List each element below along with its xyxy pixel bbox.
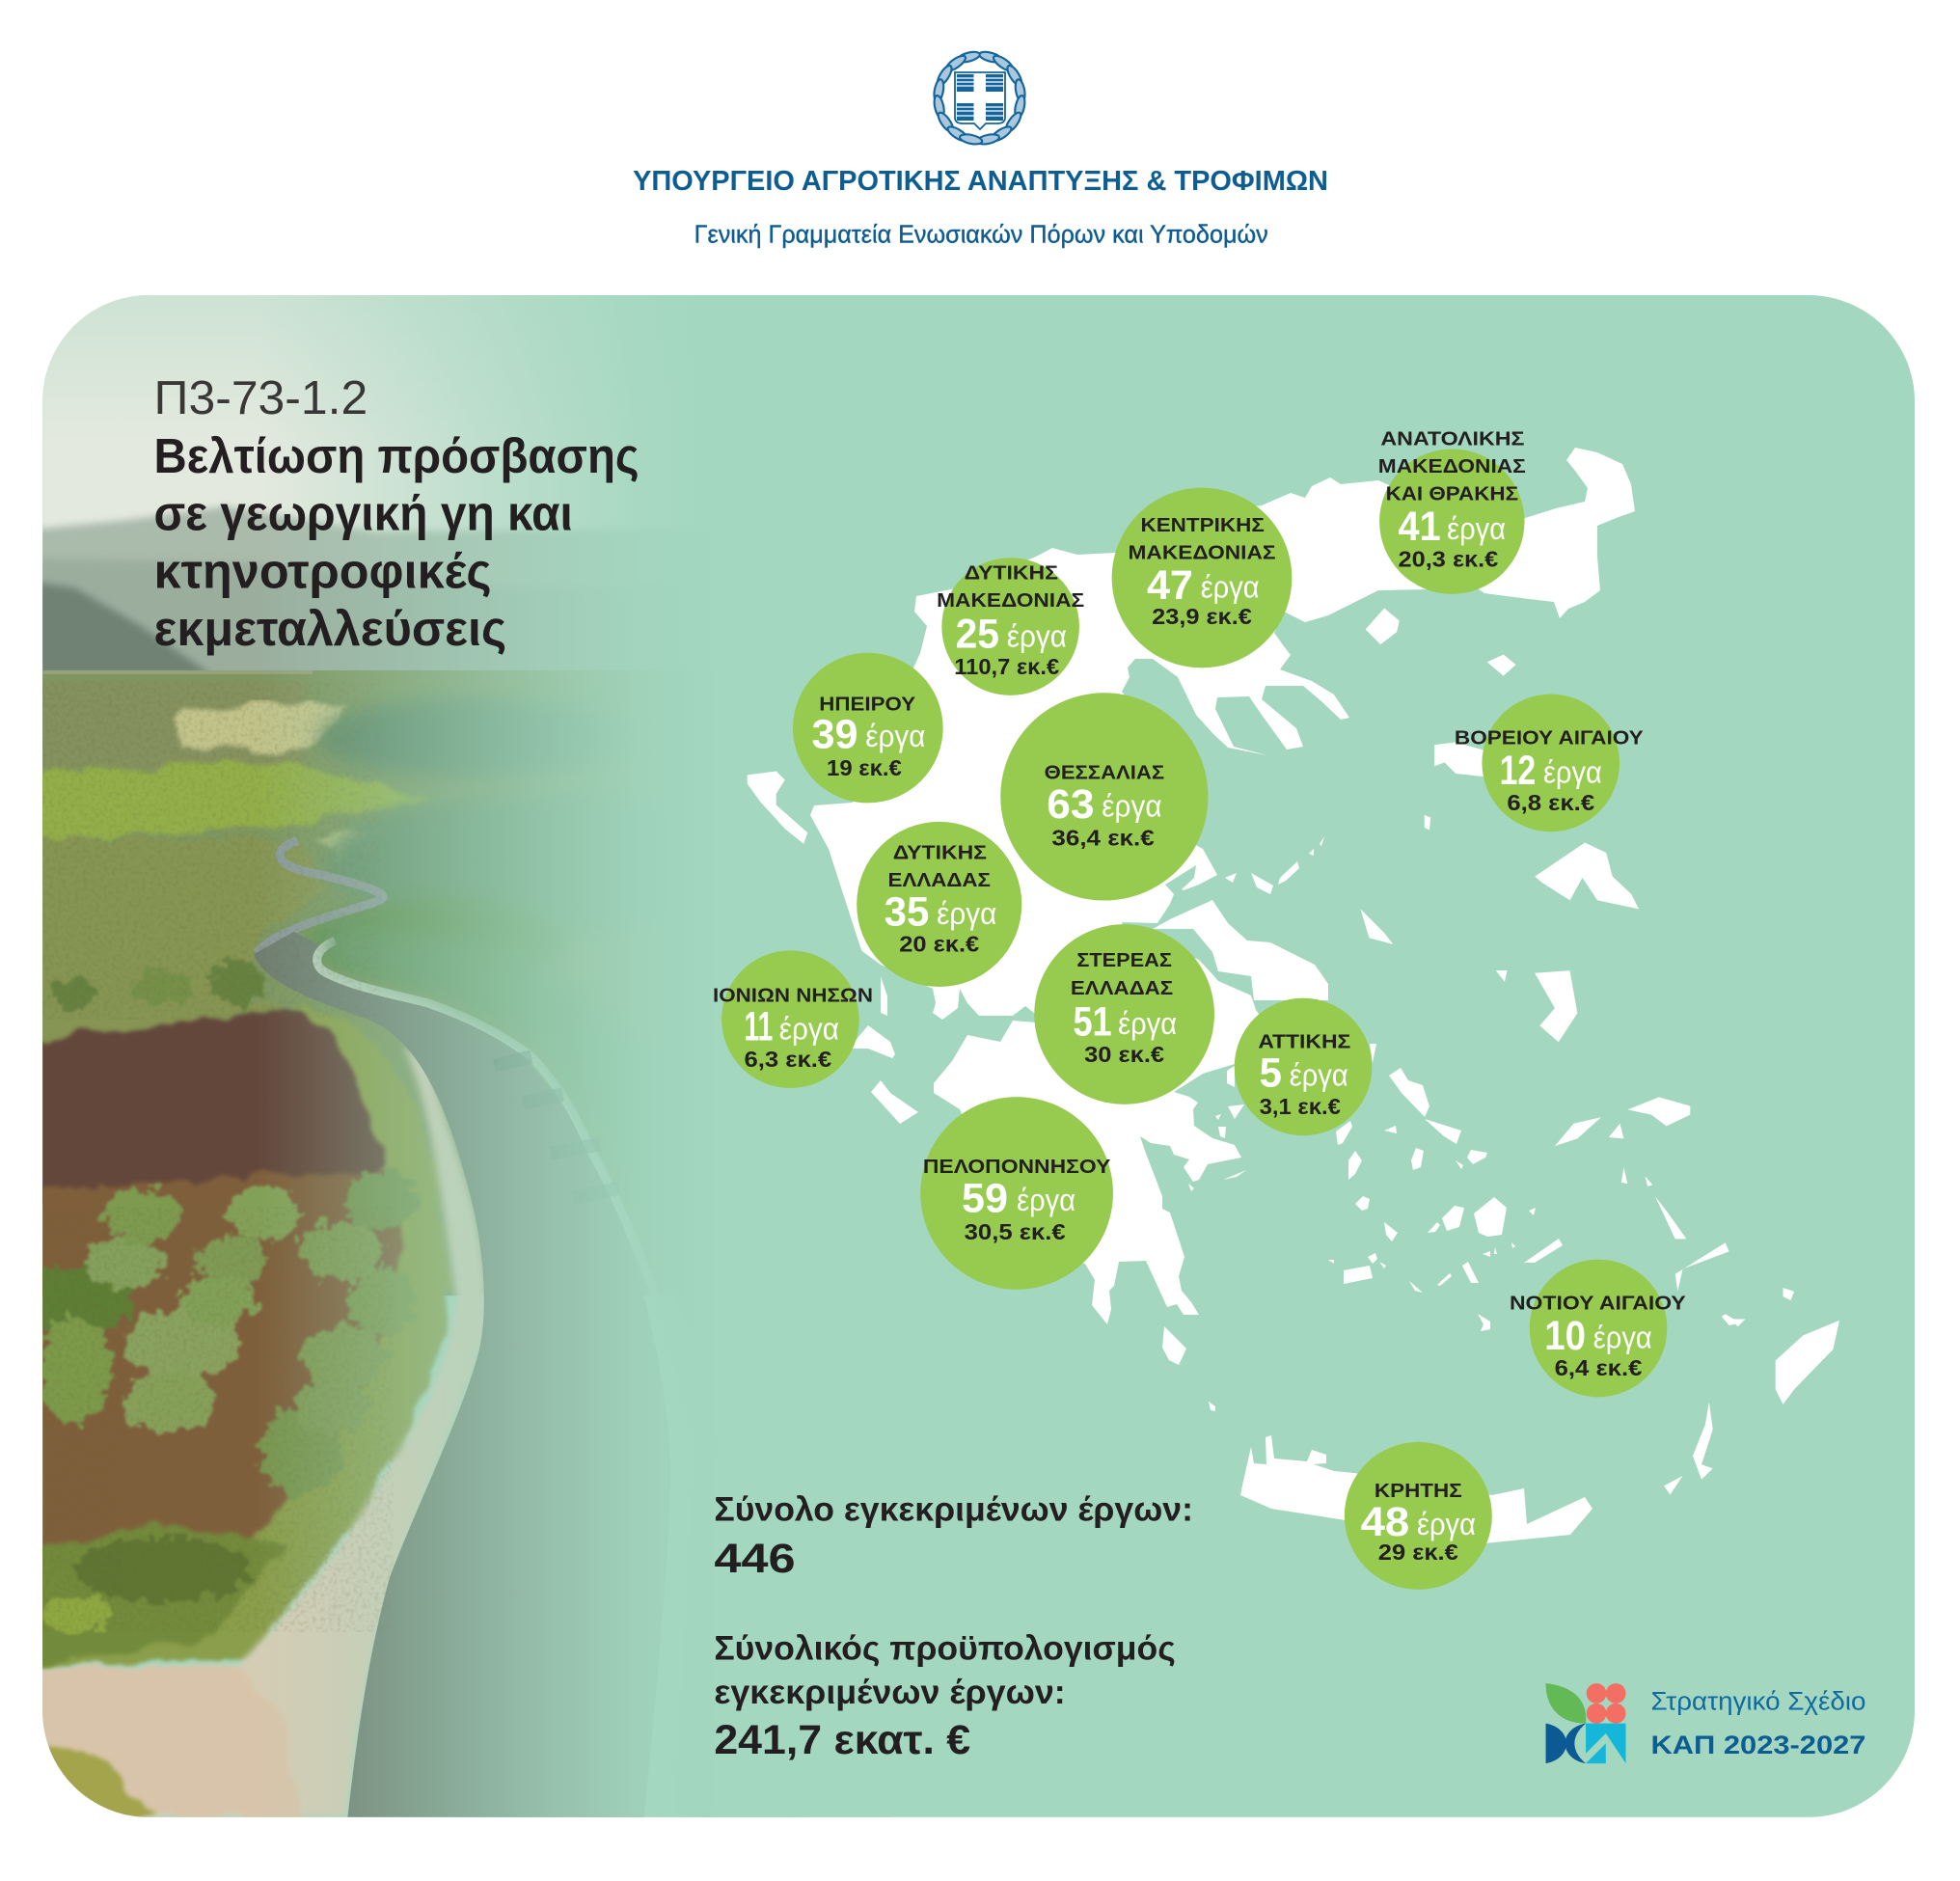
Crete <box>1240 1435 1592 1543</box>
region bubble: Attiki: έργα <box>1290 1057 1348 1092</box>
region bubble: Sterea Ellada: ΣΤΕΡΕΑΣ <box>1076 949 1172 971</box>
summary: total approved projects <box>714 1491 1193 1582</box>
region bubble: Dytiki Ellada <box>857 822 1021 987</box>
region bubble: Dytiki Ellada: ΕΛΛΑΔΑΣ <box>888 869 991 891</box>
region bubble: Kriti: 48 <box>1361 1499 1409 1545</box>
region bubble: Peloponnisos: ΠΕΛΟΠΟΝΝΗΣΟΥ <box>923 1156 1111 1178</box>
region bubble: Dytiki Makedonia: έργα <box>1007 618 1067 653</box>
region bubble: Thessalia: 63 <box>1047 781 1095 828</box>
mainland <box>810 448 1635 1324</box>
region bubble: Voreio Aigaio: έργα <box>1543 755 1602 790</box>
region bubble: Thessalia: ΘΕΣΣΑΛΙΑΣ <box>1045 762 1164 784</box>
header: ministry emblem <box>933 50 1026 146</box>
summary: total budget: εγκεκριμένων έργων: <box>714 1674 1066 1711</box>
region bubble: Notio Aigaio: 6,4 εκ.€ <box>1555 1355 1643 1380</box>
region bubble: Thessalia: 36,4 εκ.€ <box>1051 825 1155 850</box>
region bubble: Ionia Nisia: 11 <box>744 1004 773 1050</box>
region bubble: Notio Aigaio: ΝΟΤΙΟΥ ΑΙΓΑΙΟΥ <box>1510 1292 1686 1314</box>
summary: total budget: 241,7 εκατ. € <box>714 1717 970 1763</box>
region bubble: Attiki: 3,1 εκ.€ <box>1260 1094 1341 1119</box>
region bubble: Dytiki Makedonia: ΔΥΤΙΚΗΣ <box>965 561 1058 584</box>
region bubble: Dytiki Makedonia <box>937 558 1084 695</box>
logo text: Στρατηγικό Σχέδιο <box>1650 1685 1865 1715</box>
olive trees <box>25 959 417 1631</box>
region bubble: Ionia Nisia: 6,3 εκ.€ <box>744 1047 832 1072</box>
region bubble: Sterea Ellada: έργα <box>1118 1006 1177 1041</box>
region bubble: Ipeiros: 39 <box>811 711 858 757</box>
summary: total budget <box>714 1630 1176 1763</box>
region bubble: Kriti: 29 εκ.€ <box>1378 1540 1458 1565</box>
summary: total approved projects: Σύνολο εγκεκριμένων έργων: <box>714 1491 1193 1529</box>
region bubble: Dytiki Ellada: 20 εκ.€ <box>899 932 980 957</box>
region bubble: Dytiki Makedonia: ΜΑΚΕΔΟΝΙΑΣ <box>937 589 1084 612</box>
region bubble: Anatoliki Makedonia kai Thraki: ΚΑΙ ΘΡΑΚΗΣ <box>1386 483 1518 505</box>
region bubble: Ipeiros: έργα <box>865 719 925 753</box>
region bubble: Anatoliki Makedonia kai Thraki: 20,3 εκ.€ <box>1399 546 1499 571</box>
region bubble: Kriti: έργα <box>1417 1507 1476 1541</box>
region bubble: Attiki: ΑΤΤΙΚΗΣ <box>1258 1031 1350 1053</box>
region bubble: Dytiki Ellada: 35 <box>885 888 929 935</box>
summary: total budget: Σύνολικός προϋπολογισμός <box>714 1630 1176 1668</box>
header: ministry name: ΥΠΟΥΡΓΕΙΟ ΑΓΡΟΤΙΚΗΣ ΑΝΑΠΤΥΞΗΣ & ΤΡΟΦΙΜΩΝ <box>633 166 1328 197</box>
region bubble: Dytiki Ellada: έργα <box>937 896 996 931</box>
region bubble: Sterea Ellada: ΕΛΛΑΔΑΣ <box>1071 977 1173 999</box>
region bubble: Attiki: 5 <box>1260 1050 1282 1097</box>
region bubble: Peloponnisos: 30,5 εκ.€ <box>965 1219 1066 1244</box>
title: κτηνοτροφικές <box>154 543 492 598</box>
title: εκμεταλλεύσεις <box>154 601 506 656</box>
code heading: Π3-73-1.2 <box>154 371 368 424</box>
logo text <box>1650 1685 1865 1759</box>
title <box>154 428 640 656</box>
region bubble: Attiki <box>1235 998 1372 1135</box>
region bubble: Kentriki Makedonia: έργα <box>1201 570 1260 605</box>
region bubble: Anatoliki Makedonia kai Thraki: ΑΝΑΤΟΛΙΚΗΣ <box>1380 428 1525 450</box>
logo text: ΚΑΠ 2023-2027 <box>1650 1730 1865 1759</box>
region bubble: Voreio Aigaio: ΒΟΡΕΙΟΥ ΑΙΓΑΙΟΥ <box>1455 726 1644 749</box>
region bubble: Anatoliki Makedonia kai Thraki: ΜΑΚΕΔΟΝΙΑΣ <box>1378 455 1526 477</box>
summary: total approved projects: 446 <box>714 1536 796 1582</box>
region bubble: Ionia Nisia <box>713 950 873 1088</box>
region bubble: Kentriki Makedonia <box>1112 488 1292 668</box>
Euboea <box>1153 900 1328 1000</box>
region bubble: Voreio Aigaio <box>1455 695 1644 831</box>
logo: CAP strategic plan mark <box>1546 1683 1626 1763</box>
region bubble: Ipeiros: ΗΠΕΙΡΟΥ <box>819 693 915 715</box>
region bubble: Notio Aigaio: έργα <box>1593 1321 1652 1355</box>
region bubble: Dytiki Makedonia: 110,7 εκ.€ <box>954 654 1060 679</box>
region bubble: Voreio Aigaio: 12 <box>1500 748 1536 794</box>
region bubble: Ionia Nisia: ΙΟΝΙΩΝ ΝΗΣΩΝ <box>713 985 873 1007</box>
region bubble: Ipeiros <box>793 653 943 803</box>
region bubble: Anatoliki Makedonia kai Thraki: έργα <box>1447 511 1506 546</box>
region bubble: Anatoliki Makedonia kai Thraki <box>1378 428 1526 594</box>
title: Βελτίωση πρόσβασης <box>154 428 640 483</box>
title: σε γεωργική γη και <box>154 486 573 541</box>
region bubble: Ionia Nisia: έργα <box>779 1011 839 1046</box>
region bubble: Kriti: ΚΡΗΤΗΣ <box>1375 1480 1462 1502</box>
region bubble: Dytiki Ellada: ΔΥΤΙΚΗΣ <box>893 842 987 864</box>
Saronic, Ionian, Sporades, Cycladic islands and Kythera <box>849 836 1563 1411</box>
region bubble: Sterea Ellada: 30 εκ.€ <box>1084 1042 1165 1067</box>
north and east Aegean, Dodecanese, Corfu <box>748 608 1839 1494</box>
region bubble: Peloponnisos <box>920 1097 1113 1290</box>
region bubble: Peloponnisos: έργα <box>1017 1183 1075 1217</box>
region bubble: Kentriki Makedonia: ΚΕΝΤΡΙΚΗΣ <box>1140 514 1265 536</box>
region bubble: Sterea Ellada <box>1034 924 1214 1104</box>
region bubble: Notio Aigaio: 10 <box>1544 1313 1586 1359</box>
map of Greece <box>748 448 1839 1543</box>
region bubble: Kentriki Makedonia: ΜΑΚΕΔΟΝΙΑΣ <box>1129 542 1276 564</box>
region bubble: Notio Aigaio <box>1510 1260 1686 1397</box>
region bubble: Ipeiros: 19 εκ.€ <box>827 755 902 780</box>
panel: mint background with landscape photo <box>13 295 1915 1817</box>
landscape photo illustration <box>13 295 1000 1817</box>
region bubble: Peloponnisos: 59 <box>962 1175 1008 1221</box>
region bubble: Anatoliki Makedonia kai Thraki: 41 <box>1399 504 1441 550</box>
region bubble: Sterea Ellada: 51 <box>1073 999 1112 1046</box>
region bubble: Voreio Aigaio: 6,8 εκ.€ <box>1507 790 1595 815</box>
region bubble: Dytiki Makedonia: 25 <box>956 612 999 658</box>
region bubble: Kriti <box>1345 1442 1492 1590</box>
region bubble: Thessalia: έργα <box>1102 789 1162 824</box>
region bubble: Kentriki Makedonia: 23,9 εκ.€ <box>1152 604 1252 629</box>
region bubble: Thessalia <box>1000 693 1208 901</box>
region bubble: Kentriki Makedonia: 47 <box>1147 562 1193 609</box>
header: general secretariat: Γενική Γραμματεία Ενωσιακών Πόρων και Υποδομών <box>694 222 1268 249</box>
